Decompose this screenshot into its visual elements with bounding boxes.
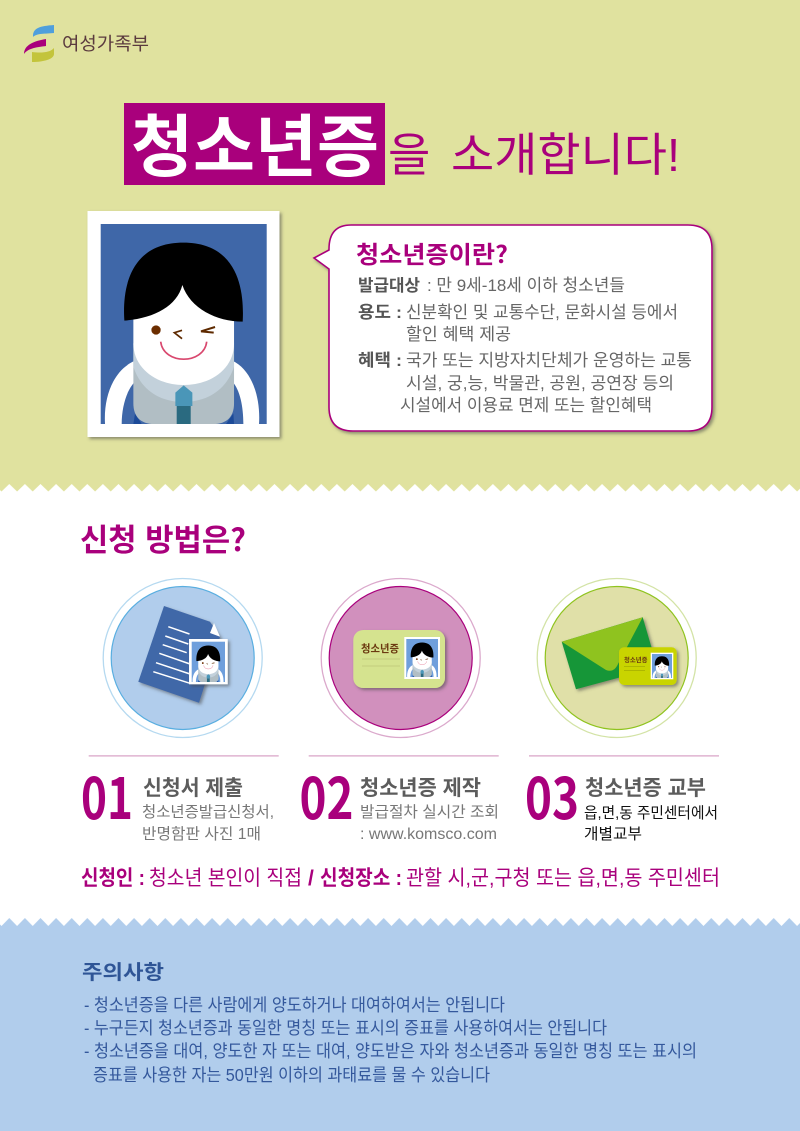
- step 3 text: 개별교부: [584, 825, 642, 843]
- step title: 신청서 제출: [143, 777, 243, 800]
- cautions heading: 주의사항: [82, 961, 164, 984]
- step description: 읍,면,동 주민센터에서: [584, 804, 718, 822]
- photo frame with character: [88, 211, 280, 437]
- applicant and place line: 청소년 본인이 직접: [149, 867, 302, 890]
- usage: [358, 303, 678, 344]
- step 3 text: [525, 754, 718, 843]
- step 1 text: [81, 754, 274, 843]
- applicant and place line: [81, 867, 720, 890]
- step 1 text: 반명함판 사진 1매: [142, 825, 261, 843]
- bubble shape: [314, 225, 712, 431]
- title rest: 소개합니다!: [451, 129, 680, 181]
- benefits: [358, 351, 692, 415]
- bottom background panel: [0, 926, 800, 1131]
- cautions list: - 청소년증을 다른 사람에게 양도하거나 대여하여서는 안됩니다: [84, 995, 505, 1015]
- zigzag edge blue: [0, 918, 800, 926]
- cautions panel text: [82, 961, 697, 1085]
- usage: 할인 혜택 제공: [406, 325, 511, 344]
- step number 02: 02: [300, 754, 354, 836]
- step 2 text: : www.komsco.com: [360, 826, 497, 843]
- step 2 text: [300, 754, 499, 843]
- step 2 icon: ID card: 청소년증: [361, 642, 399, 655]
- step title: 청소년증 제작: [360, 777, 481, 800]
- applicant and place line: 신청장소 :: [320, 867, 402, 890]
- cautions list: - 청소년증을 대여, 양도한 자 또는 대여, 양도받은 자와 청소년증과 동일한 명칭 또는 표시의: [84, 1041, 697, 1061]
- top background panel: [0, 0, 800, 484]
- applicant and place line: 관할 시,군,구청 또는 읍,면,동 주민센터: [406, 867, 720, 890]
- step 1 icon: application form: [103, 578, 262, 738]
- cautions list: [84, 995, 697, 1085]
- step 3 icon: envelope and card: 청소년증: [624, 655, 648, 664]
- title word: 청소년증: [131, 110, 379, 186]
- logo text: 여성가족부: [62, 34, 149, 54]
- title rest: 을: [388, 129, 430, 181]
- step title: 청소년증 교부: [585, 777, 706, 800]
- logo: ministry: [24, 25, 149, 62]
- cautions list: 증표를 사용한 자는 50만원 이하의 과태료를 물 수 있습니다: [93, 1065, 490, 1085]
- step number 03: 03: [525, 754, 579, 836]
- issue target: 발급대상: [358, 276, 420, 295]
- step description: 발급절차 실시간 조회: [360, 803, 499, 821]
- applicant and place line: /: [308, 867, 314, 890]
- title highlight box: [124, 103, 385, 185]
- icon: logo swooshes: [24, 25, 54, 62]
- step 2 icon: ID card: [321, 578, 480, 738]
- title: [124, 103, 680, 186]
- benefits: 국가 또는 지방자치단체가 운영하는 교통: [406, 351, 692, 370]
- step description: 청소년증발급신청서,: [142, 803, 274, 821]
- usage: 신분확인 및 교통수단, 문화시설 등에서: [406, 303, 678, 322]
- benefits: 혜택 :: [358, 351, 402, 370]
- section heading: how to apply: 신청 방법은?: [80, 515, 246, 560]
- benefits: 시설, 궁,능, 박물관, 공원, 공연장 등의: [406, 374, 674, 393]
- speech bubble: what is the youth ID: [314, 225, 712, 431]
- applicant and place line: 신청인 :: [81, 867, 145, 890]
- zigzag edge yellow: [0, 484, 800, 492]
- usage: 용도 :: [358, 303, 402, 322]
- step 3 icon: envelope and card: [537, 578, 696, 738]
- step number 01: 01: [81, 754, 133, 836]
- issue target: : 만 9세-18세 이하 청소년들: [427, 276, 625, 295]
- character portrait: [105, 243, 259, 424]
- benefits: 시설에서 이용료 면제 또는 할인혜택: [400, 396, 652, 415]
- step divider lines: [89, 755, 719, 757]
- cautions list: - 누구든지 청소년증과 동일한 명칭 또는 표시의 증표를 사용하여서는 안됩니다: [84, 1018, 607, 1038]
- bubble heading: 청소년증이란?: [356, 235, 508, 270]
